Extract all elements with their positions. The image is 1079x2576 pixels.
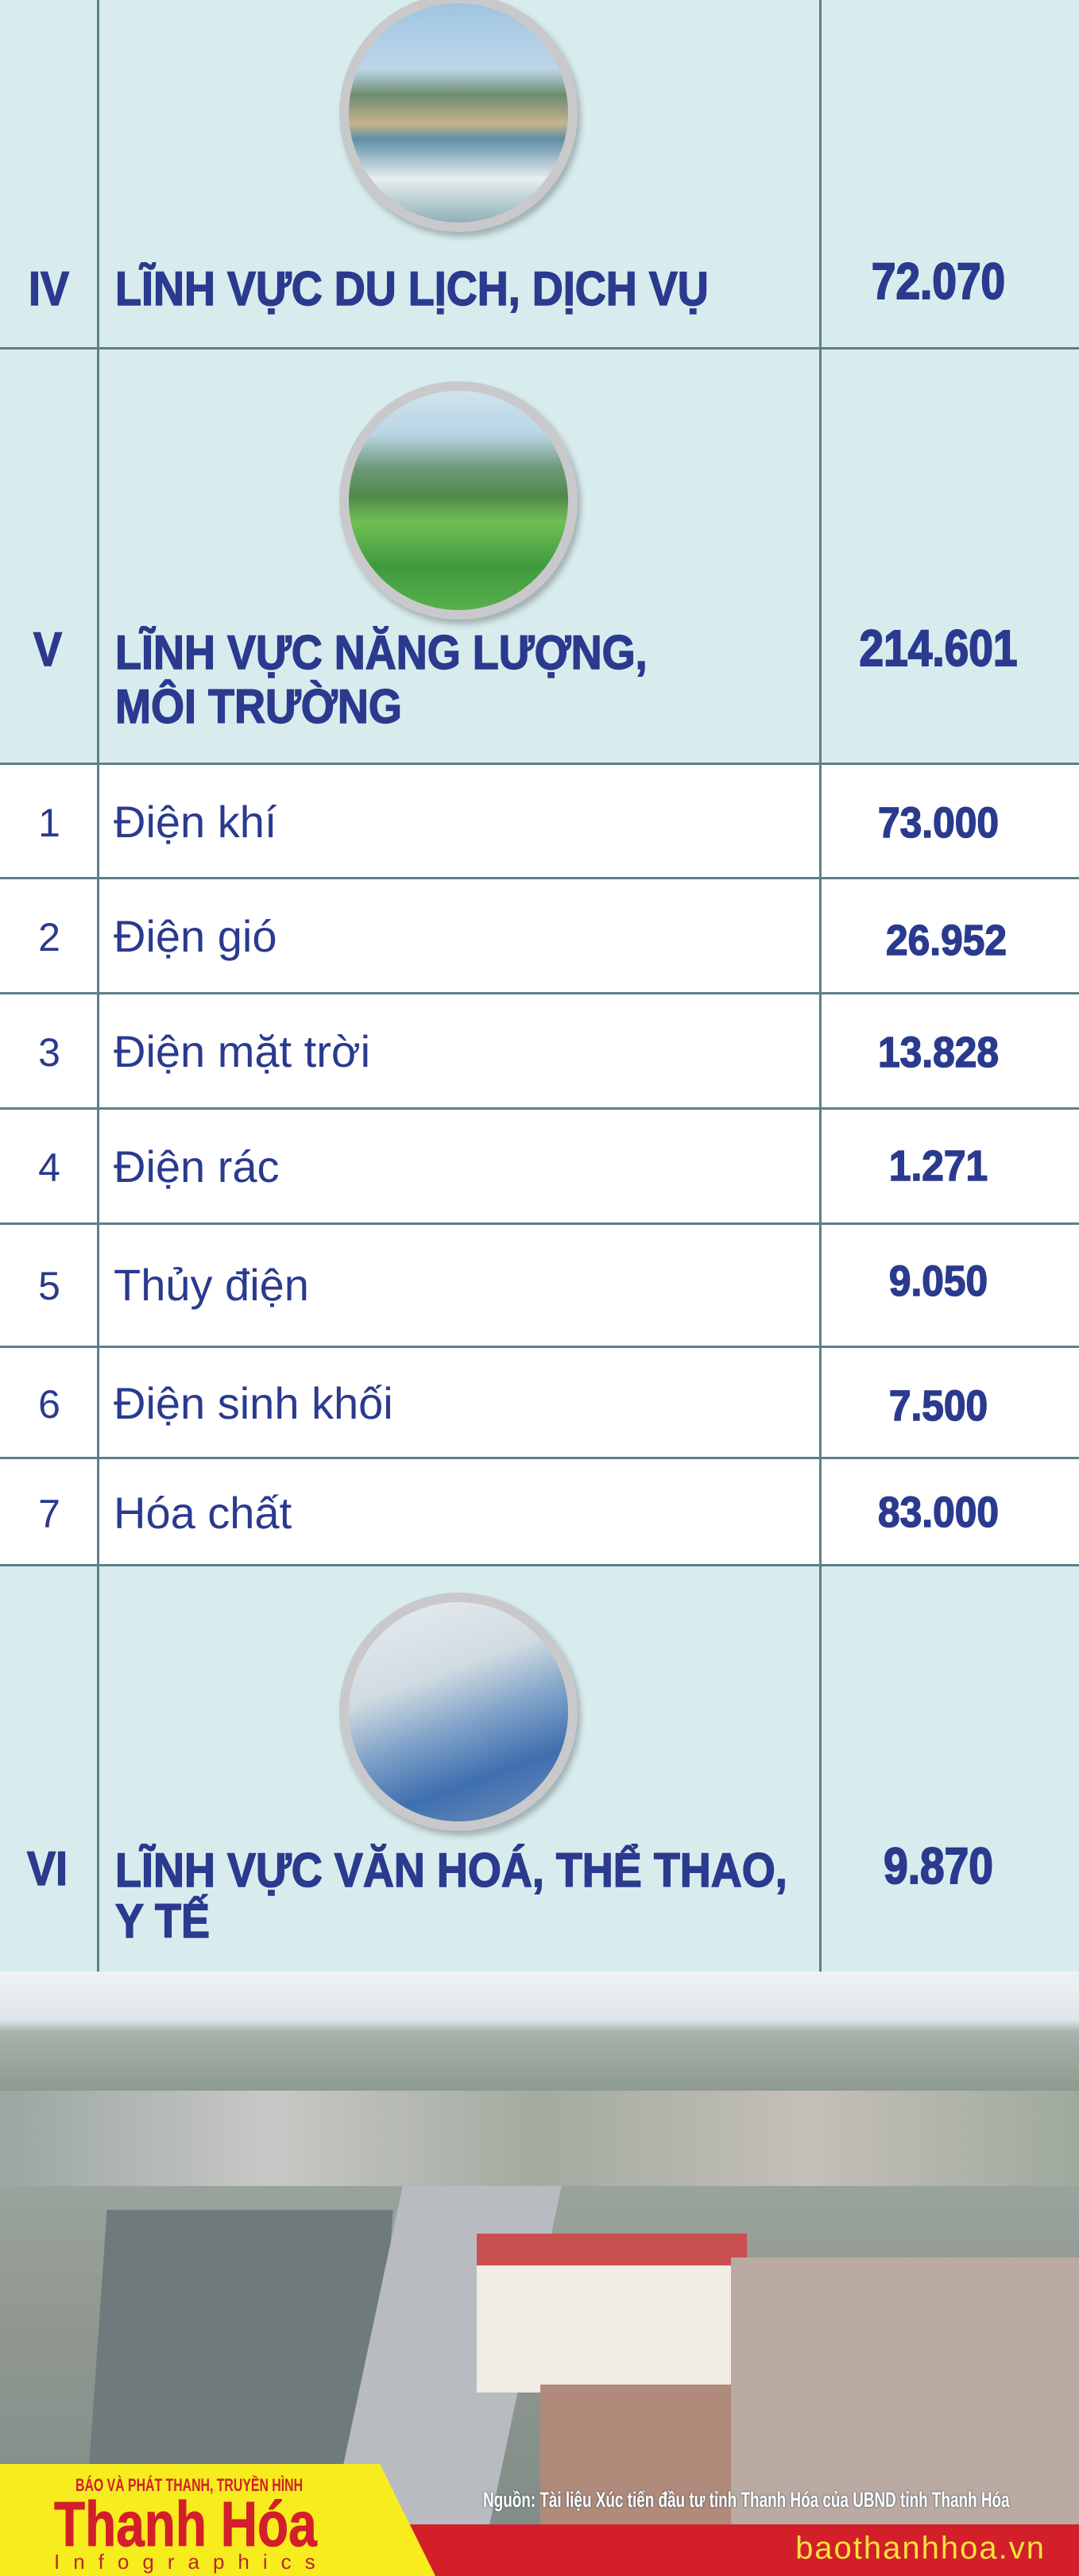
- logo panel: [0, 2464, 435, 2576]
- row 6: 7.500: [889, 1382, 988, 1430]
- row 1: Điện khí: [114, 797, 277, 847]
- row 5: 9.050: [889, 1257, 988, 1305]
- website url: baothanhhoa.vn: [795, 2531, 1046, 2566]
- heading VI: [115, 1844, 787, 1948]
- heading IV: LĨNH VỰC DU LỊCH, DỊCH VỤ: [115, 262, 709, 315]
- value IV: 72.070: [872, 253, 1005, 310]
- row 4: 1.271: [889, 1142, 988, 1190]
- row 7: 83.000: [878, 1489, 999, 1536]
- row 6: Điện sinh khối: [114, 1378, 393, 1428]
- logo name: Thanh Hóa: [54, 2489, 317, 2559]
- row 2: 2: [38, 915, 60, 960]
- row 3: 13.828: [878, 1029, 999, 1076]
- icon: power line field photo circle: [339, 381, 578, 620]
- row 6: 6: [38, 1382, 60, 1427]
- row 2: Điện gió: [114, 911, 277, 961]
- row 1: [0, 765, 1079, 879]
- heading V: [115, 626, 648, 733]
- icon: beach photo circle: [339, 0, 578, 232]
- section number IV: IV: [29, 262, 69, 315]
- row 4: 4: [38, 1145, 60, 1190]
- panel: section V energy: [0, 350, 1079, 765]
- row 7: Hóa chất: [114, 1488, 292, 1538]
- heading VI: Y TẾ: [115, 1894, 210, 1948]
- source note: Nguồn: Tài liệu Xúc tiến đầu tư tỉnh Thanh Hóa của UBND tỉnh Thanh Hóa: [483, 2488, 1010, 2512]
- value VI: 9.870: [884, 1837, 993, 1894]
- row 4: Điện rác: [114, 1141, 280, 1191]
- heading V: MÔI TRƯỜNG: [115, 680, 402, 733]
- logo subtitle: Infographics: [54, 2550, 329, 2574]
- row 3: [0, 994, 1079, 1110]
- logo tagline: BÁO VÀ PHÁT THANH, TRUYỀN HÌNH: [75, 2475, 303, 2495]
- row 2: 26.952: [886, 917, 1007, 964]
- section number V: V: [33, 623, 62, 676]
- photo: town aerial view: [0, 1972, 1079, 2576]
- panel: section VI culture: [0, 1566, 1079, 1972]
- footer red band: [0, 2524, 1079, 2576]
- row 3: Điện mặt trời: [114, 1026, 370, 1076]
- row 1: 73.000: [878, 799, 999, 847]
- row 5: Thủy điện: [114, 1260, 309, 1310]
- row 5: 5: [38, 1264, 60, 1308]
- row 2: [0, 879, 1079, 994]
- row 4: [0, 1110, 1079, 1225]
- row 7: 7: [38, 1492, 60, 1536]
- panel: section IV tourism: [0, 0, 1079, 350]
- row 6: [0, 1348, 1079, 1459]
- section number VI: VI: [27, 1842, 68, 1895]
- heading VI: LĨNH VỰC VĂN HOÁ, THỂ THAO,: [115, 1844, 787, 1897]
- icon: hospital photo circle: [339, 1593, 578, 1831]
- column dividers: [97, 0, 99, 1972]
- heading V: LĨNH VỰC NĂNG LƯỢNG,: [115, 626, 648, 679]
- row 3: 3: [38, 1030, 60, 1075]
- row 5: [0, 1225, 1079, 1348]
- row 7: [0, 1459, 1079, 1566]
- value V: 214.601: [860, 620, 1017, 677]
- row 1: 1: [38, 801, 60, 845]
